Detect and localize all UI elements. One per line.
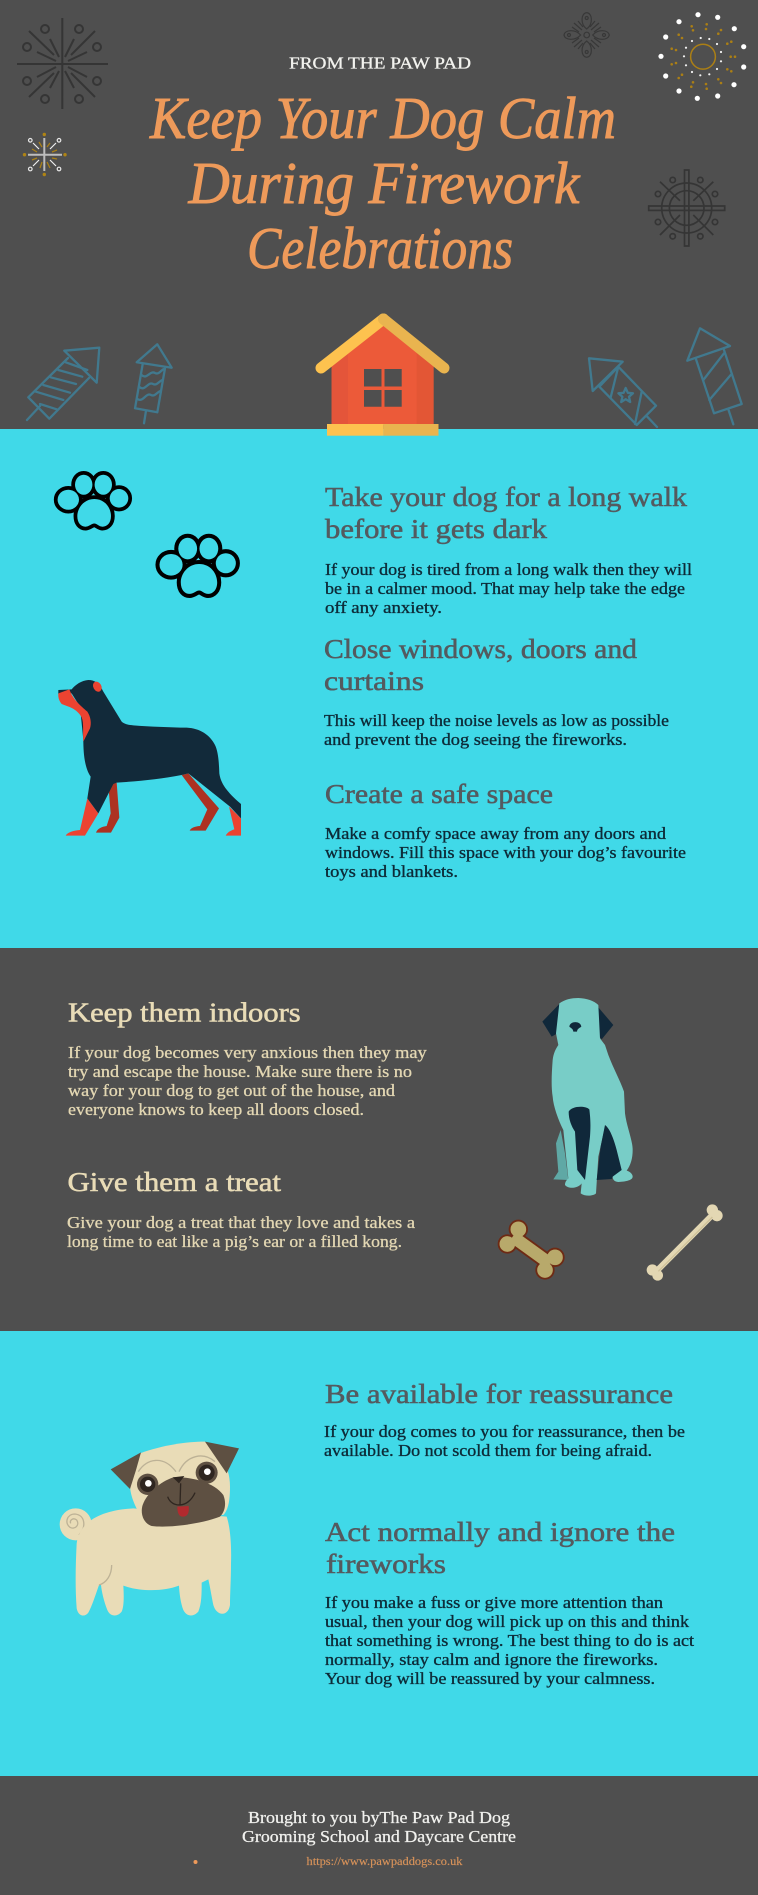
- panel: reassurance tips: [0, 1331, 758, 1776]
- website address: https://www.pawpaddogs.co.uk: [306, 1856, 463, 1868]
- tip: give a treat: [67, 1167, 416, 1251]
- credit text: Brought to you byThe Paw Pad Dog: [248, 1808, 510, 1827]
- tip: act normally: fireworks: [326, 1549, 446, 1579]
- icon: tan bone: [498, 1220, 565, 1280]
- icon: striped rocket far left: [27, 348, 99, 420]
- tip: close windows: curtains: [324, 666, 424, 696]
- credit text: [242, 1808, 516, 1846]
- tip: safe space: Create a safe space: [325, 779, 553, 809]
- illustration: sitting dog: [542, 998, 633, 1196]
- icon: paw print two: [160, 538, 236, 594]
- tip: long walk: be in a calmer mood. That may help take the edge: [325, 579, 685, 598]
- tip: be available: [324, 1379, 685, 1460]
- tip: give a treat: long time to eat like a pig’s ear or a filled kong.: [67, 1232, 402, 1251]
- tip: close windows: [324, 634, 669, 749]
- credit text: Grooming School and Daycare Centre: [242, 1827, 516, 1846]
- tip: give a treat: Give them a treat: [68, 1167, 282, 1197]
- panel: top tips: [0, 429, 758, 948]
- tip: safe space: Make a comfy space away from any doors and: [325, 824, 667, 843]
- tip: close windows: This will keep the noise levels as low as possible: [324, 711, 669, 730]
- icon: dark flower firework: [564, 13, 609, 57]
- tip: be available: Be available for reassurance: [325, 1379, 673, 1409]
- tip: long walk: Take your dog for a long walk: [325, 482, 688, 512]
- icon: white and gold ring firework: [658, 12, 746, 101]
- tip: act normally: Act normally and ignore the: [325, 1517, 675, 1547]
- tip: keep indoors: Keep them indoors: [68, 998, 301, 1028]
- tip: safe space: [325, 779, 686, 881]
- tip: act normally: If you make a fuss or give more attention than: [325, 1593, 663, 1612]
- tip: long walk: If your dog is tired from a long walk then they will: [325, 560, 692, 579]
- tip: safe space: toys and blankets.: [325, 862, 458, 881]
- panel: indoor tips: [0, 948, 758, 1331]
- bullet dot: [194, 1860, 198, 1864]
- tip: act normally: usual, then your dog will pick up on this and think: [325, 1612, 690, 1631]
- icon: small gold and white firework: [23, 133, 67, 176]
- panel: footer: [0, 1776, 758, 1895]
- icon: long cream bone: [647, 1204, 723, 1281]
- tip: close windows: and prevent the dog seeing the fireworks.: [324, 730, 627, 749]
- tip: keep indoors: way for your dog to get out of the house, and: [68, 1081, 396, 1100]
- tip: keep indoors: try and escape the house. Make sure there is no: [68, 1062, 412, 1081]
- panel: header: [0, 0, 758, 429]
- tip: be available: available. Do not scold them for being afraid.: [324, 1441, 652, 1460]
- icon: dark wheel firework: [649, 170, 725, 246]
- tip: act normally: that something is wrong. The best thing to do is act: [325, 1631, 694, 1650]
- icon: paw print one: [58, 475, 128, 527]
- tip: close windows: Close windows, doors and: [324, 634, 638, 664]
- title: [149, 85, 616, 281]
- illustration: pug: [60, 1442, 239, 1616]
- icon: star rocket: [589, 358, 657, 427]
- tip: act normally: [325, 1517, 694, 1688]
- tip: long walk: [325, 482, 692, 617]
- tip: act normally: normally, stay calm and ignore the fireworks.: [325, 1650, 658, 1669]
- icon: dark firework top left: [17, 18, 108, 109]
- tip: keep indoors: [68, 998, 428, 1119]
- title: Celebrations: [247, 215, 513, 281]
- tip: be available: If your dog comes to you for reassurance, then be: [324, 1422, 685, 1441]
- title: During Firework: [188, 150, 581, 216]
- icon: dog house: [321, 319, 444, 436]
- tip: safe space: windows. Fill this space with your dog’s favourite: [325, 843, 686, 862]
- tip: long walk: before it gets dark: [325, 514, 548, 544]
- tip: act normally: Your dog will be reassured by your calmness.: [325, 1669, 655, 1688]
- illustration: rottweiler: [58, 680, 241, 836]
- tip: long walk: off any anxiety.: [325, 598, 442, 617]
- icon: wavy rocket: [135, 344, 172, 423]
- eyebrow text: FROM THE PAW PAD: [289, 54, 471, 72]
- tip: keep indoors: If your dog becomes very anxious then they may: [68, 1043, 428, 1062]
- tip: keep indoors: everyone knows to keep all doors closed.: [68, 1100, 364, 1119]
- title: Keep Your Dog Calm: [149, 85, 616, 151]
- icon: diagonal stripe rocket far right: [687, 328, 742, 424]
- tip: give a treat: Give your dog a treat that they love and takes a: [67, 1213, 416, 1232]
